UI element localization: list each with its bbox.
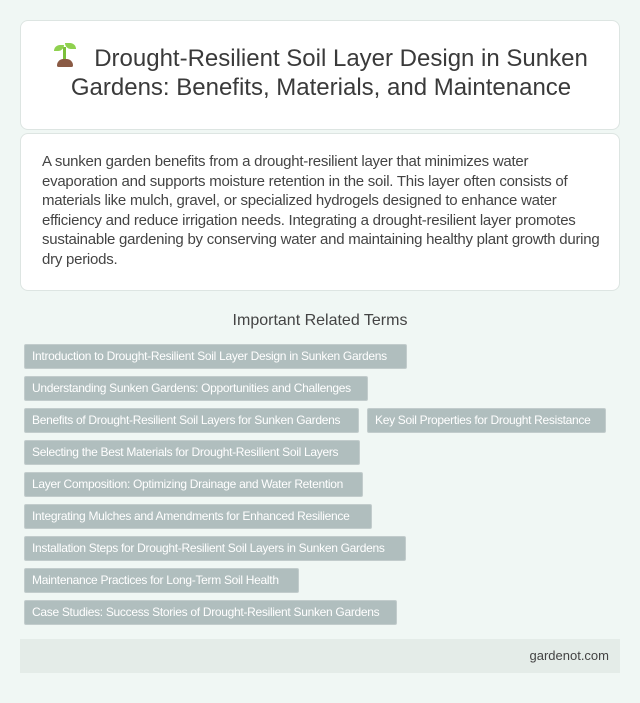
icon: seedling — [54, 43, 76, 67]
tag 9 — [24, 568, 299, 593]
tag 3 — [24, 408, 359, 433]
tag 6 — [24, 472, 363, 497]
tag 10: Case Studies: Success Stories of Drought-Resilient Sunken Gardens — [32, 605, 379, 619]
header panel — [20, 20, 620, 130]
tag 10 — [24, 600, 397, 625]
description panel — [20, 133, 620, 291]
tag 6: Layer Composition: Optimizing Drainage and Water Retention — [32, 477, 343, 491]
tag 7 — [24, 504, 372, 529]
title: Drought-Resilient Soil Layer Design in Sunken Gardens: Benefits, Materials, and Maintenance — [71, 45, 588, 101]
tag 3: Benefits of Drought-Resilient Soil Layers for Sunken Gardens — [32, 413, 340, 427]
tag 8: Installation Steps for Drought-Resilient Soil Layers in Sunken Gardens — [32, 541, 385, 555]
tag 2: Understanding Sunken Gardens: Opportunities and Challenges — [32, 381, 351, 395]
tag 9: Maintenance Practices for Long-Term Soil Health — [32, 573, 279, 587]
tag 1 — [24, 344, 407, 369]
tag 4: Key Soil Properties for Drought Resistance — [375, 413, 591, 427]
tag 5: Selecting the Best Materials for Drought-Resilient Soil Layers — [32, 445, 338, 459]
footer — [20, 639, 620, 673]
footer source: gardenot.com — [530, 648, 609, 663]
tag 1: Introduction to Drought-Resilient Soil Layer Design in Sunken Gardens — [32, 349, 387, 363]
description text: A sunken garden benefits from a drought-resilient layer that minimizes water evaporation and supports moisture retention in the soil. This layer often consists of materials like mulch, gravel, or specialized hydrogels designed to enhance water efficiency and reduce irrigation needs. Integrating a drought-resilient layer promotes sustainable gardening by conserving water and maintaining healthy plant growth during dry periods. — [42, 153, 599, 268]
tag 7: Integrating Mulches and Amendments for Enhanced Resilience — [32, 509, 349, 523]
tag 4 — [367, 408, 606, 433]
section heading: Important Related Terms — [233, 312, 407, 329]
tag 8 — [24, 536, 406, 561]
tag 2 — [24, 376, 368, 401]
tag 5 — [24, 440, 360, 465]
